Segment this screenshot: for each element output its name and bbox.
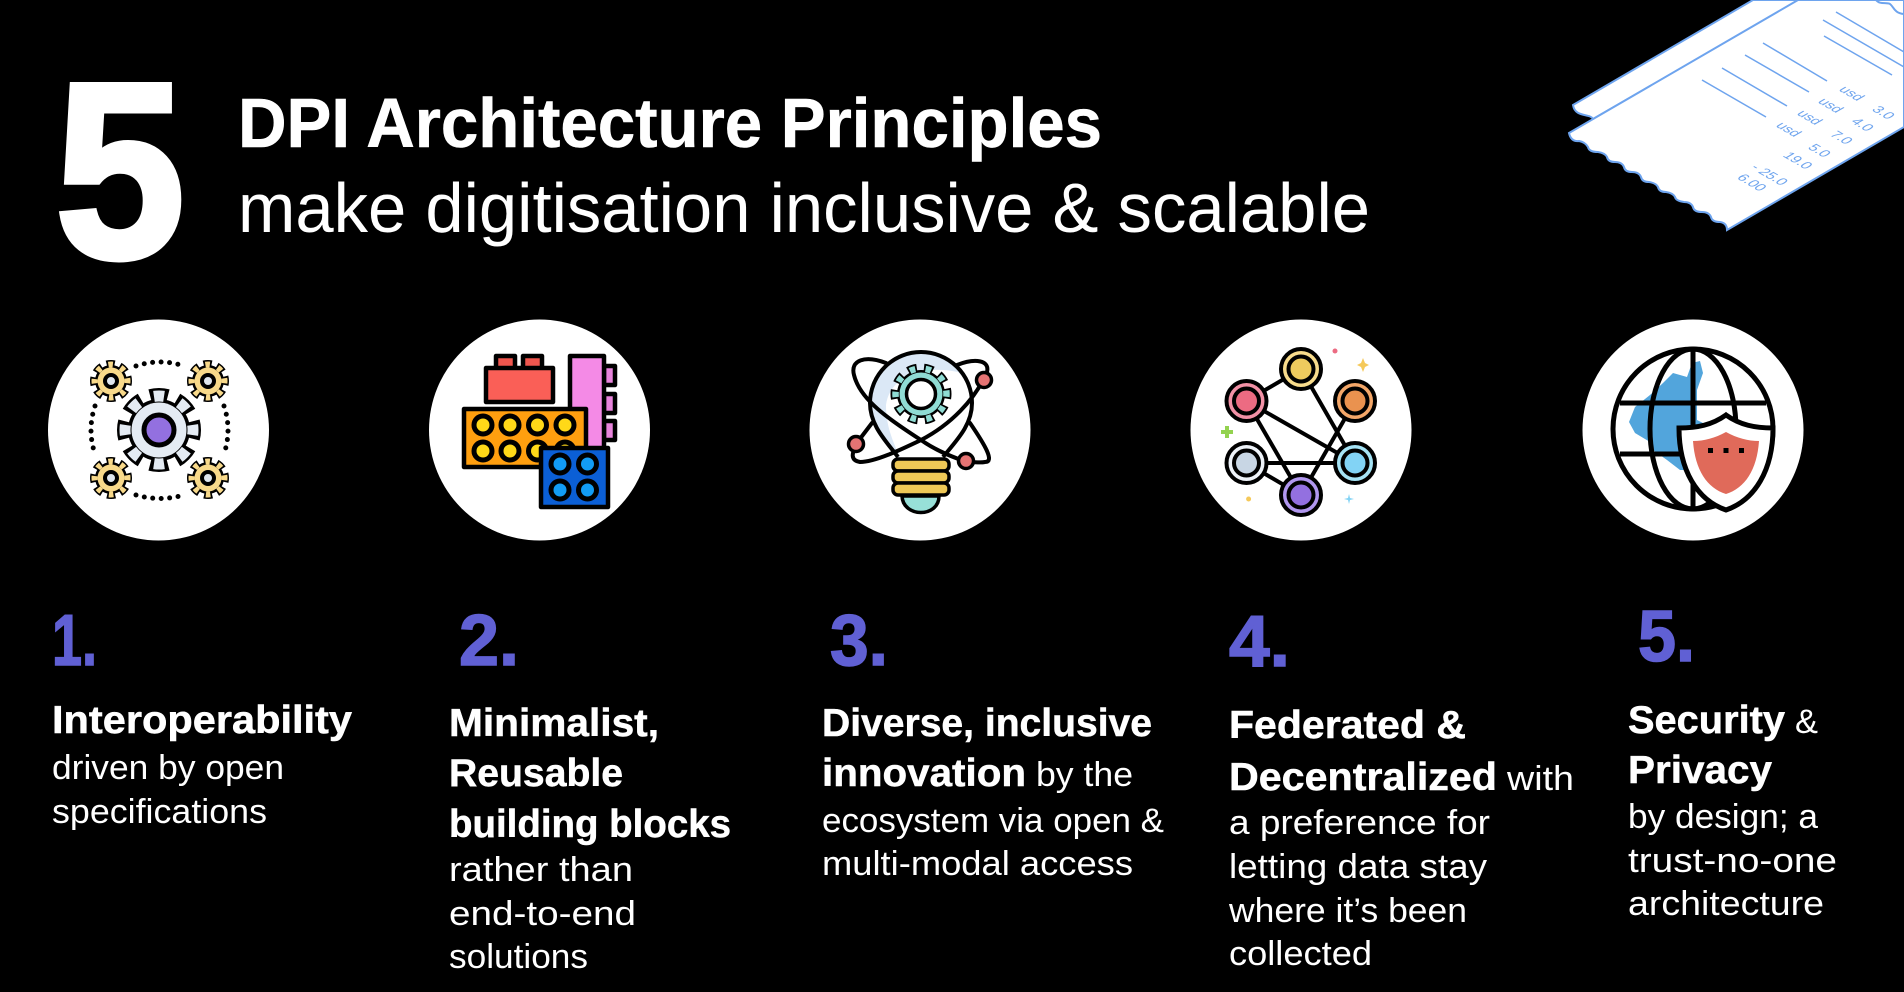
title: make digitisation inclusive & scalable: [238, 169, 1370, 247]
principle 1: [52, 601, 352, 831]
principle 1: Interoperability: [52, 699, 352, 742]
principle 3: Diverse, inclusive: [822, 702, 1152, 745]
principle 3: innovation: [822, 752, 1026, 795]
principle 2: solutions: [449, 938, 588, 976]
illustration: receipts: usd: [1793, 107, 1827, 127]
principle 4: Decentralized: [1229, 756, 1497, 799]
illustration: receipts: 7.0: [1826, 128, 1857, 146]
small gears: [94, 364, 225, 495]
icon: building blocks: [429, 320, 650, 540]
big numeral 5: 5: [55, 31, 185, 310]
principle 2: Minimalist,: [449, 702, 659, 745]
principle 5: 5.: [1638, 597, 1695, 677]
principle 4: Federated &: [1229, 704, 1466, 747]
principle 4: [1228, 602, 1574, 973]
principle 2: end-to-end: [449, 895, 636, 933]
principle 2: Reusable: [449, 752, 623, 795]
illustration: receipts: - 25.0: [1747, 161, 1792, 187]
principle 3: by the: [1036, 756, 1133, 794]
principle 4: with: [1506, 760, 1574, 798]
principle 1: specifications: [52, 793, 267, 831]
principle 3: ecosystem via open &: [822, 802, 1164, 840]
principle 4: a preference for: [1229, 804, 1490, 842]
illustration: receipts: [1569, 0, 1904, 230]
principle 3: multi-modal access: [822, 845, 1133, 883]
illustration: receipts: 19.0: [1779, 149, 1817, 171]
bulb gear: [895, 368, 947, 420]
icon: federated network: [1190, 320, 1412, 540]
principle 5: architecture: [1628, 885, 1824, 923]
principle 4: collected: [1229, 935, 1372, 973]
principle 5: &: [1795, 703, 1818, 741]
illustration: receipts: usd: [1835, 83, 1869, 103]
principle 5: [1628, 597, 1837, 923]
illustration: receipts: 5.0: [1804, 141, 1835, 159]
principle 2: rather than: [449, 851, 633, 889]
principle 5: Security: [1628, 699, 1785, 742]
principle 1: driven by open: [52, 749, 284, 787]
main gear: [124, 395, 194, 465]
icon: lightbulb with gear: [810, 320, 1030, 540]
illustration: receipts: usd: [1814, 95, 1848, 115]
principle 5: Privacy: [1628, 749, 1772, 792]
principle 3: [822, 601, 1164, 883]
title: DPI Architecture Principles: [238, 84, 1102, 162]
principle 4: where it’s been: [1228, 892, 1467, 930]
principle 1: 1.: [52, 601, 97, 681]
illustration: receipts: 6.00: [1733, 171, 1771, 193]
illustration: receipts: usd: [1772, 119, 1806, 139]
illustration: receipts: 3.0: [1868, 103, 1899, 121]
principle 2: 2.: [459, 601, 519, 681]
principle 3: 3.: [830, 601, 888, 681]
principle 4: 4.: [1229, 602, 1290, 682]
principle 5: trust-no-one: [1628, 842, 1837, 880]
principle 5: by design; a: [1628, 798, 1818, 836]
icon: gears: [48, 320, 269, 540]
principle 2: building blocks: [449, 803, 731, 846]
illustration: receipts: 4.0: [1847, 115, 1878, 133]
principle 4: letting data stay: [1229, 848, 1487, 886]
principle 2: [449, 601, 731, 976]
icon: globe with shield: [1582, 320, 1804, 540]
title: [238, 84, 1370, 247]
